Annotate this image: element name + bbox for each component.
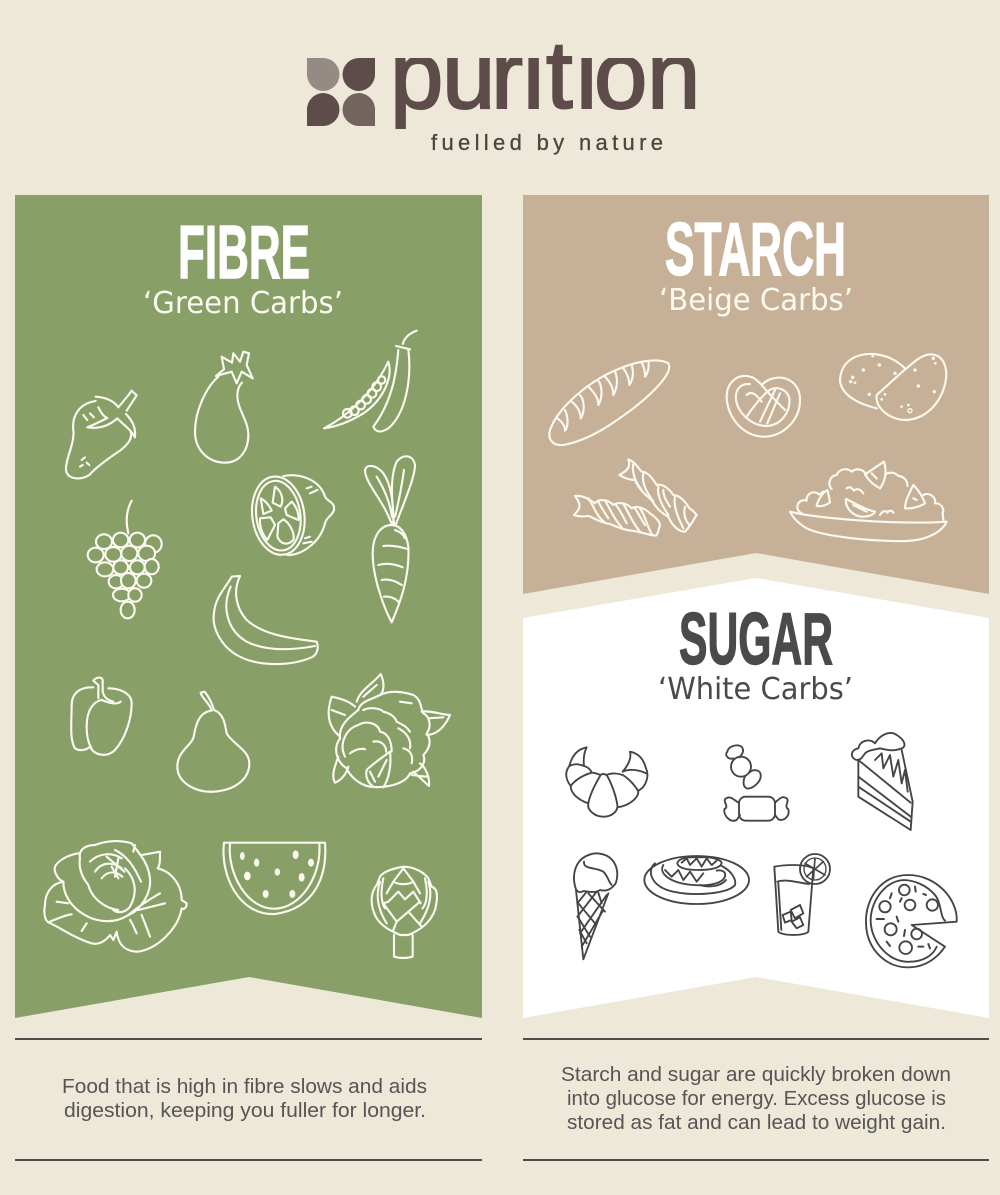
icon: pretzel	[727, 376, 800, 437]
sugar icons	[566, 733, 957, 967]
panel: fibre	[15, 195, 482, 1018]
icon: candies	[724, 745, 789, 821]
text: fibre explanation: Food that is high in fibre slows and aids	[62, 1075, 427, 1098]
starch icons	[549, 354, 947, 541]
icon: potatoes	[840, 354, 946, 420]
icon: carrot	[365, 456, 415, 622]
panel: starch and sugar explanation	[523, 1039, 989, 1160]
icon: grapes	[88, 501, 162, 618]
text: starch and sugar explanation: into glucose for energy. Excess glucose is	[567, 1087, 946, 1110]
icon: pepper	[71, 678, 132, 755]
icon: banana	[214, 576, 318, 664]
panel: starch	[523, 195, 989, 594]
text: fibre explanation	[62, 1075, 427, 1122]
icon: baguette	[549, 361, 669, 445]
logo tagline: fuelled by nature	[431, 130, 663, 155]
logo	[307, 44, 696, 155]
text: fibre explanation: digestion, keeping you fuller for longer.	[64, 1099, 426, 1122]
icon: croissant	[566, 747, 647, 817]
icon: plate	[644, 856, 749, 904]
subheading: white carbs: ‘White Carbs’	[658, 672, 853, 707]
icon: cake	[852, 733, 913, 830]
icon: pear	[177, 692, 249, 792]
icon: artichoke	[372, 867, 437, 958]
icon: cauliflower	[329, 674, 450, 787]
icon: rice plate	[790, 462, 947, 541]
heading: sugar: SUGAR	[679, 599, 833, 680]
icon: watermelon	[223, 843, 325, 914]
logo mark: four petals	[307, 58, 375, 126]
icon: strawberry	[66, 391, 137, 478]
heading: starch: STARCH	[665, 207, 846, 291]
fibre icons, lower	[44, 674, 450, 958]
icon: ice cream	[574, 853, 617, 959]
icon: lemon	[247, 473, 334, 558]
subheading: beige carbs: ‘Beige Carbs’	[659, 283, 853, 318]
text: starch and sugar explanation	[561, 1063, 951, 1134]
heading: fibre: FIBRE	[178, 210, 310, 294]
icon: aubergine	[195, 352, 253, 463]
icon: pizza	[866, 875, 957, 967]
panel: fibre explanation	[15, 1039, 482, 1160]
icon: pasta	[574, 459, 697, 536]
fibre icons, upper	[66, 331, 417, 664]
text: starch and sugar explanation: Starch and sugar are quickly broken down	[561, 1063, 951, 1086]
logo wordmark: purition	[390, 22, 700, 129]
text: starch and sugar explanation: stored as fat and can lead to weight gain.	[567, 1111, 946, 1134]
icon: lettuce	[44, 841, 187, 952]
panel: sugar	[523, 578, 989, 1018]
icon: peas	[324, 331, 417, 431]
subheading: green carbs: ‘Green Carbs’	[143, 286, 343, 321]
icon: drink	[774, 854, 830, 935]
